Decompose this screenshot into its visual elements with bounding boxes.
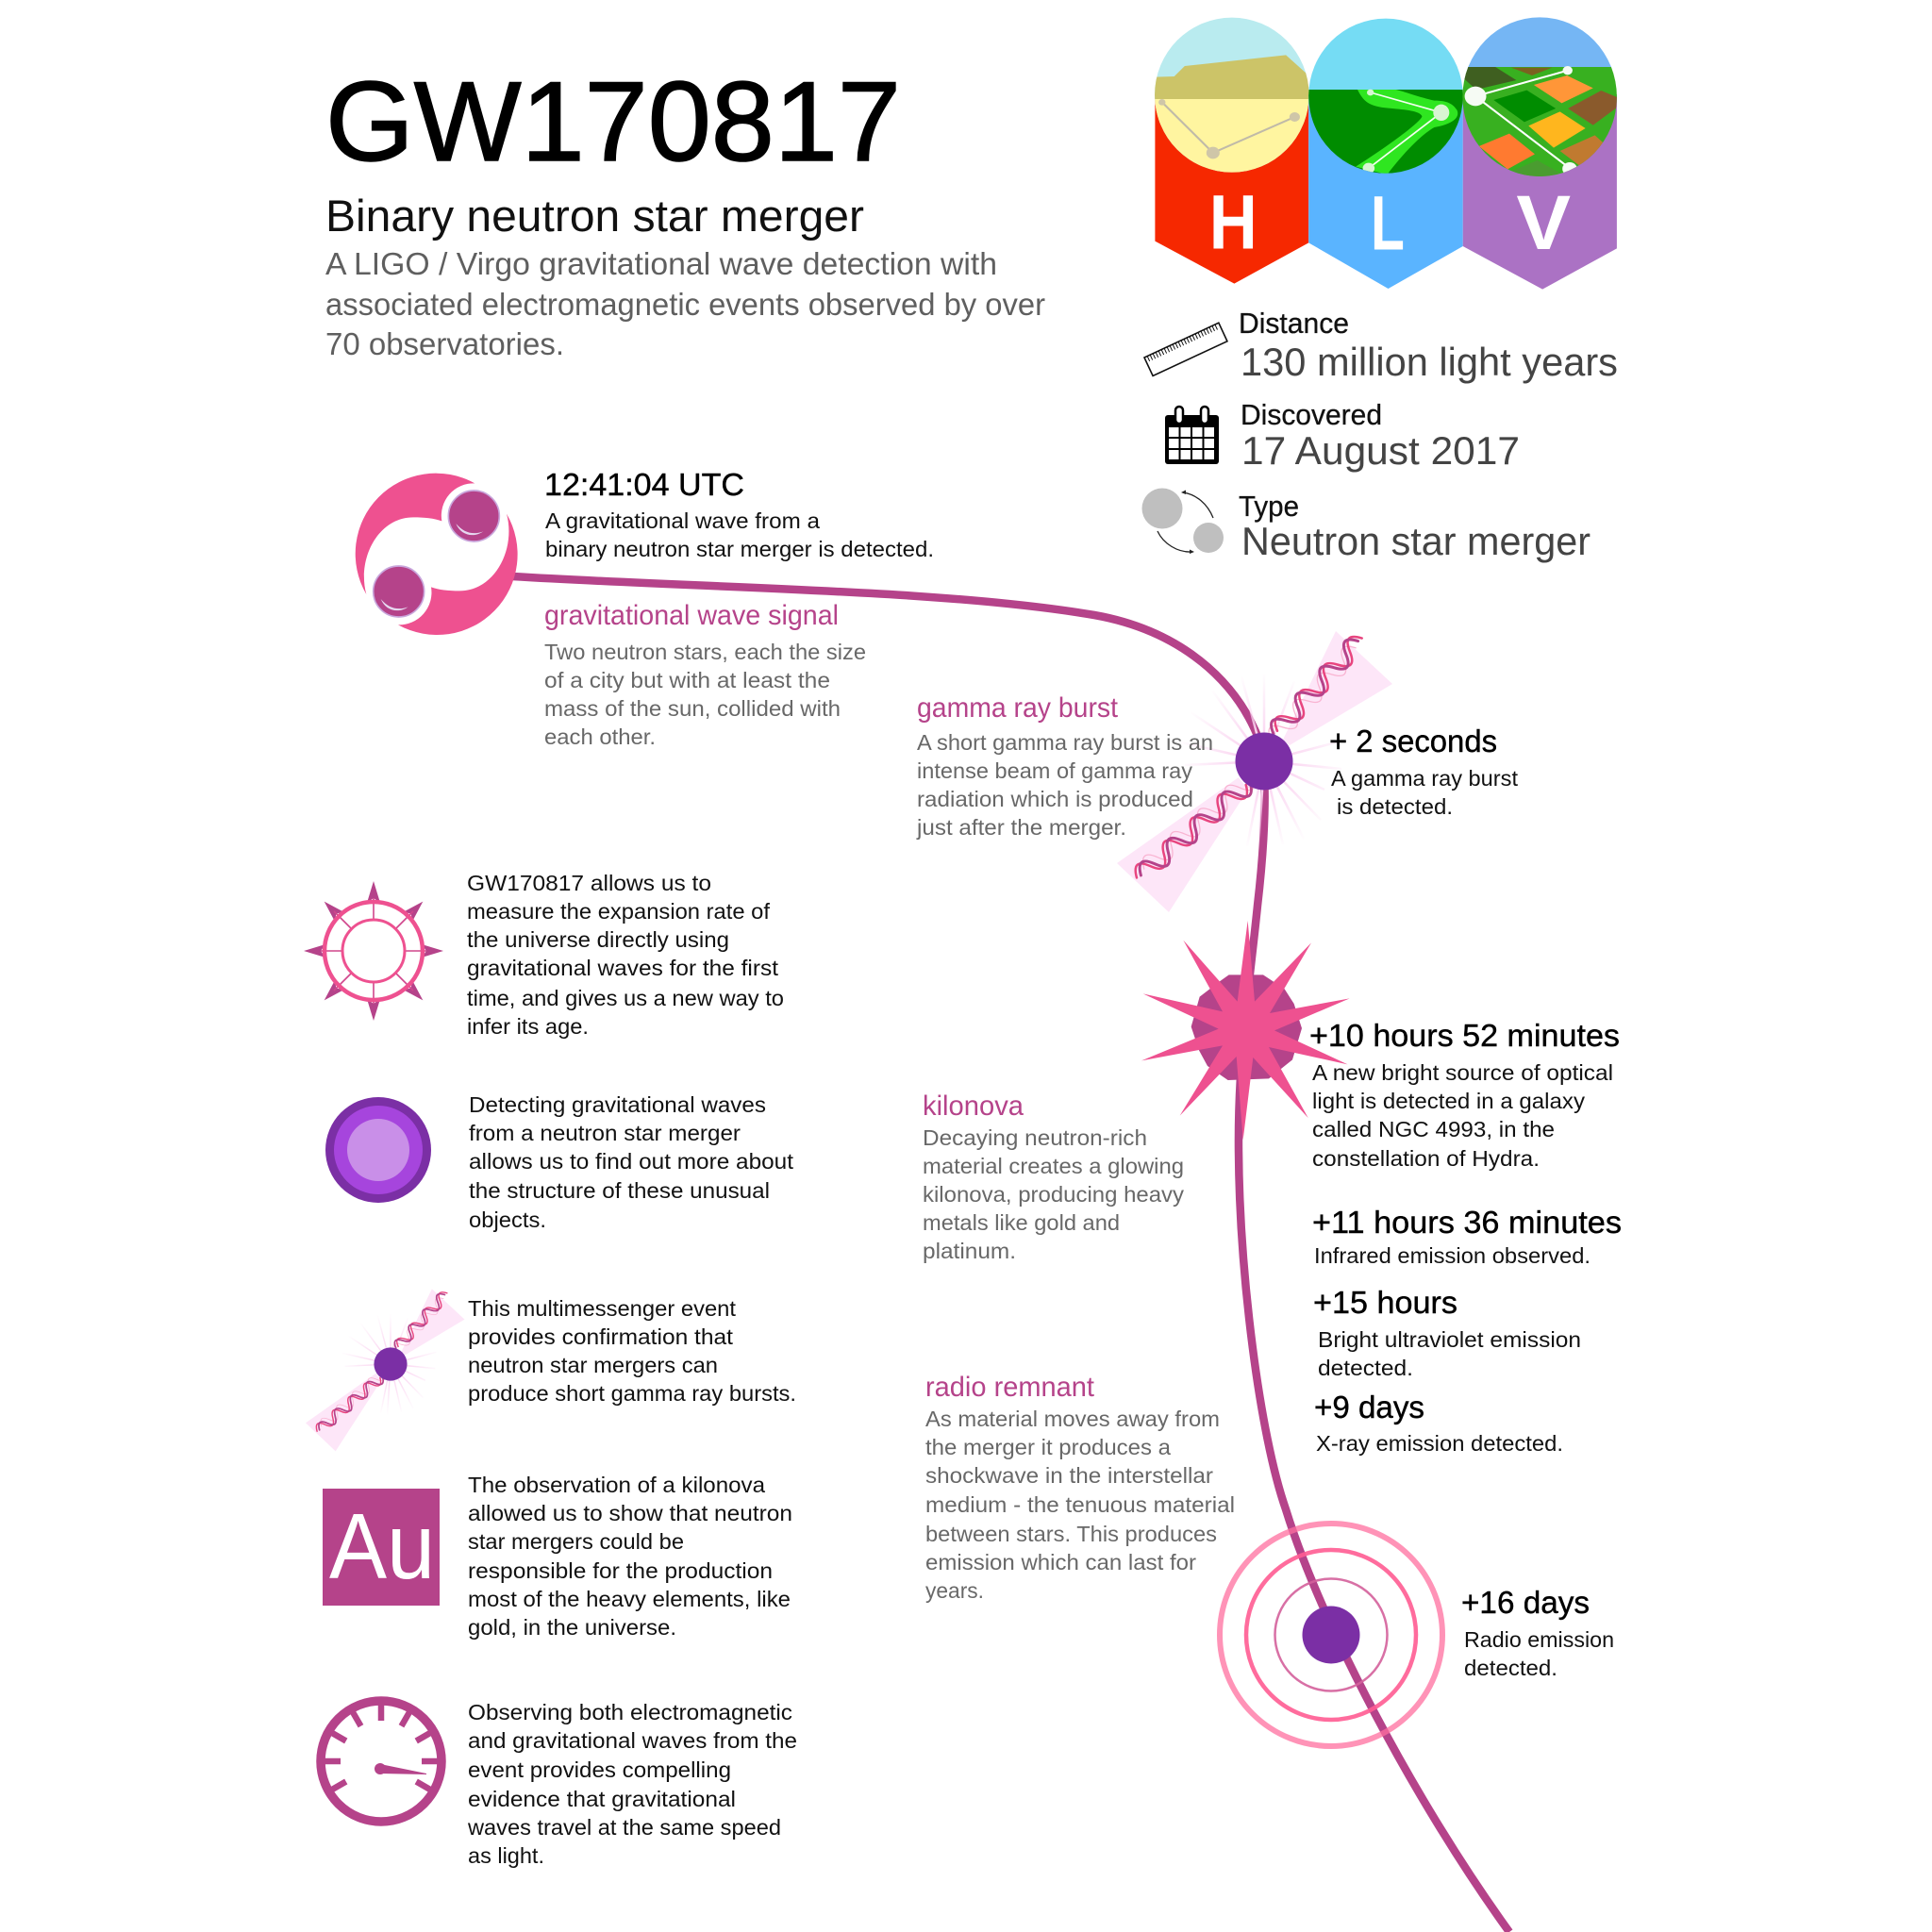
plus 16 days event: detected. [1464, 1656, 1557, 1680]
discovered fact [1241, 398, 1520, 473]
gravitational wave signal explanation: of a city but with at least the [544, 668, 830, 692]
neutron star structure text: the structure of these unusual [469, 1178, 770, 1203]
plus 15 hours event: detected. [1318, 1356, 1413, 1380]
plus 11 hours event: Infrared emission observed. [1314, 1243, 1591, 1268]
icon: kilonova star [1141, 921, 1350, 1140]
plus 10 hours event: +10 hours 52 minutes [1309, 1018, 1620, 1053]
kilonova explanation: kilonova [923, 1091, 1024, 1122]
badge L: L [1371, 180, 1405, 266]
speed of gravity text: as light. [468, 1843, 544, 1868]
HLV detector badges [1152, 12, 1619, 290]
kilonova explanation: Decaying neutron-rich [923, 1125, 1147, 1150]
gamma ray burst explanation: A short gamma ray burst is an [917, 730, 1213, 755]
gravitational wave event text [544, 467, 934, 561]
icon: small gamma ray burst [306, 1289, 464, 1451]
badge V [1460, 16, 1619, 290]
badge L [1306, 16, 1466, 289]
gamma ray burst explanation: gamma ray burst [917, 692, 1119, 724]
heavy elements text: The observation of a kilonova [468, 1473, 766, 1497]
plus 10 hours event: constellation of Hydra. [1312, 1146, 1540, 1171]
expansion rate text: measure the expansion rate of [467, 899, 770, 924]
gamma ray burst explanation: just after the merger. [916, 815, 1126, 840]
intro text: associated electromagnetic events observed by over [325, 288, 1045, 323]
icon: neutron star disc [325, 1097, 431, 1203]
distance fact: 130 million light years [1241, 340, 1618, 384]
gravitational wave signal explanation: each other. [544, 724, 656, 749]
plus 10 hours event: A new bright source of optical [1312, 1060, 1613, 1085]
expansion rate text [467, 871, 784, 1039]
speed of gravity text: waves travel at the same speed [467, 1815, 781, 1840]
subtitle heading: Binary neutron star merger [325, 191, 864, 241]
plus 11 hours event: +11 hours 36 minutes [1312, 1205, 1622, 1240]
icon: gold element tile: Au [329, 1494, 435, 1598]
neutron star structure text: allows us to find out more about [469, 1149, 793, 1174]
radio remnant explanation: As material moves away from [925, 1407, 1220, 1431]
plus 2 seconds event: A gamma ray burst [1331, 766, 1518, 791]
kilonova explanation: kilonova, producing heavy [923, 1182, 1184, 1207]
heavy elements text: responsible for the production [468, 1558, 773, 1583]
plus 15 hours event: +15 hours [1313, 1285, 1457, 1320]
discovered fact: 17 August 2017 [1241, 428, 1520, 473]
speed of gravity text: and gravitational waves from the [468, 1728, 797, 1753]
gravitational wave signal explanation: gravitational wave signal [544, 600, 839, 631]
type fact: Type [1239, 490, 1299, 523]
intro text: 70 observatories. [325, 327, 564, 362]
plus 10 hours event: light is detected in a galaxy [1312, 1089, 1585, 1113]
radio remnant explanation [925, 1372, 1235, 1603]
plus 2 seconds event [1329, 724, 1518, 819]
title: GW170817 [325, 58, 901, 185]
kilonova explanation: metals like gold and [923, 1210, 1120, 1235]
expansion rate text: time, and gives us a new way to [467, 986, 784, 1010]
plus 16 days event [1461, 1585, 1614, 1680]
radio remnant explanation: years. [925, 1578, 984, 1603]
distance fact: Distance [1239, 307, 1349, 340]
gravitational wave event text: binary neutron star merger is detected. [545, 537, 934, 561]
plus 2 seconds event: + 2 seconds [1329, 724, 1497, 758]
gravitational wave signal explanation: mass of the sun, collided with [544, 696, 841, 721]
icon: calendar [1165, 407, 1219, 464]
plus 15 hours event: Bright ultraviolet emission [1318, 1327, 1581, 1352]
gravitational wave event text: 12:41:04 UTC [544, 467, 744, 502]
speed of gravity text: event provides compelling [468, 1757, 731, 1782]
neutron star structure text: from a neutron star merger [469, 1121, 741, 1145]
kilonova explanation: platinum. [923, 1239, 1016, 1263]
heavy elements text [468, 1473, 792, 1640]
gravitational wave event text: A gravitational wave from a [545, 508, 821, 533]
kilonova explanation: material creates a glowing [923, 1154, 1184, 1178]
gravitational wave signal explanation: Two neutron stars, each the size [544, 640, 866, 664]
plus 10 hours event [1309, 1018, 1620, 1171]
plus 16 days event: +16 days [1461, 1585, 1590, 1620]
gamma ray burst explanation [916, 692, 1213, 840]
badge H [1152, 12, 1312, 284]
speed of gravity text: evidence that gravitational [468, 1787, 736, 1811]
timeline curve [512, 576, 1509, 1932]
radio remnant explanation: the merger it produces a [925, 1435, 1172, 1459]
expansion rate text: the universe directly using [467, 927, 729, 952]
icon: radio rings [1220, 1524, 1442, 1746]
plus 9 days event: X-ray emission detected. [1316, 1431, 1563, 1456]
speed of gravity text: Observing both electromagnetic [468, 1700, 792, 1724]
radio remnant explanation: between stars. This produces [925, 1522, 1217, 1546]
badge H: H [1209, 179, 1257, 265]
multimessenger text: neutron star mergers can [468, 1353, 718, 1377]
radio remnant explanation: radio remnant [925, 1372, 1095, 1403]
expansion rate text: infer its age. [467, 1014, 589, 1039]
kilonova explanation [923, 1091, 1184, 1263]
neutron star structure text: objects. [469, 1208, 546, 1232]
plus 2 seconds event: is detected. [1337, 794, 1453, 819]
plus 15 hours event [1313, 1285, 1581, 1380]
plus 10 hours event: called NGC 4993, in the [1312, 1117, 1555, 1141]
multimessenger text: This multimessenger event [468, 1296, 736, 1321]
expansion rate text: gravitational waves for the first [467, 956, 778, 980]
heavy elements text: most of the heavy elements, like [468, 1587, 791, 1611]
neutron star structure text: Detecting gravitational waves [469, 1092, 766, 1117]
heavy elements text: star mergers could be [468, 1529, 684, 1554]
icon: expansion compass [304, 881, 443, 1021]
heavy elements text: gold, in the universe. [468, 1615, 676, 1640]
multimessenger text [468, 1296, 796, 1406]
intro text [325, 247, 1045, 362]
speed of gravity text [467, 1700, 797, 1868]
icon: gamma ray burst [1117, 631, 1392, 912]
icon: ruler [1144, 323, 1227, 375]
type fact: Neutron star merger [1241, 519, 1591, 563]
discovered fact: Discovered [1241, 398, 1382, 431]
icon: speedometer [321, 1701, 441, 1822]
radio remnant explanation: medium - the tenuous material [925, 1492, 1235, 1517]
distance fact [1239, 307, 1618, 384]
radio remnant explanation: emission which can last for [925, 1550, 1196, 1574]
plus 11 hours event [1312, 1205, 1622, 1268]
plus 16 days event: Radio emission [1464, 1627, 1614, 1652]
neutron star structure text [469, 1092, 793, 1232]
icon: binary orbit [1141, 489, 1224, 554]
badge V: V [1516, 180, 1571, 266]
multimessenger text: produce short gamma ray bursts. [468, 1381, 796, 1406]
type fact [1239, 490, 1591, 563]
heavy elements text: allowed us to show that neutron [468, 1501, 792, 1525]
intro text: A LIGO / Virgo gravitational wave detection with [325, 247, 997, 282]
radio remnant explanation: shockwave in the interstellar [925, 1463, 1213, 1488]
gamma ray burst explanation: intense beam of gamma ray [917, 758, 1192, 783]
plus 9 days event [1314, 1390, 1563, 1456]
multimessenger text: provides confirmation that [468, 1324, 733, 1349]
gravitational wave signal explanation [544, 600, 866, 749]
expansion rate text: GW170817 allows us to [467, 871, 711, 895]
gamma ray burst explanation: radiation which is produced [917, 787, 1193, 811]
icon: merging neutron stars [356, 474, 518, 635]
plus 9 days event: +9 days [1314, 1390, 1424, 1424]
